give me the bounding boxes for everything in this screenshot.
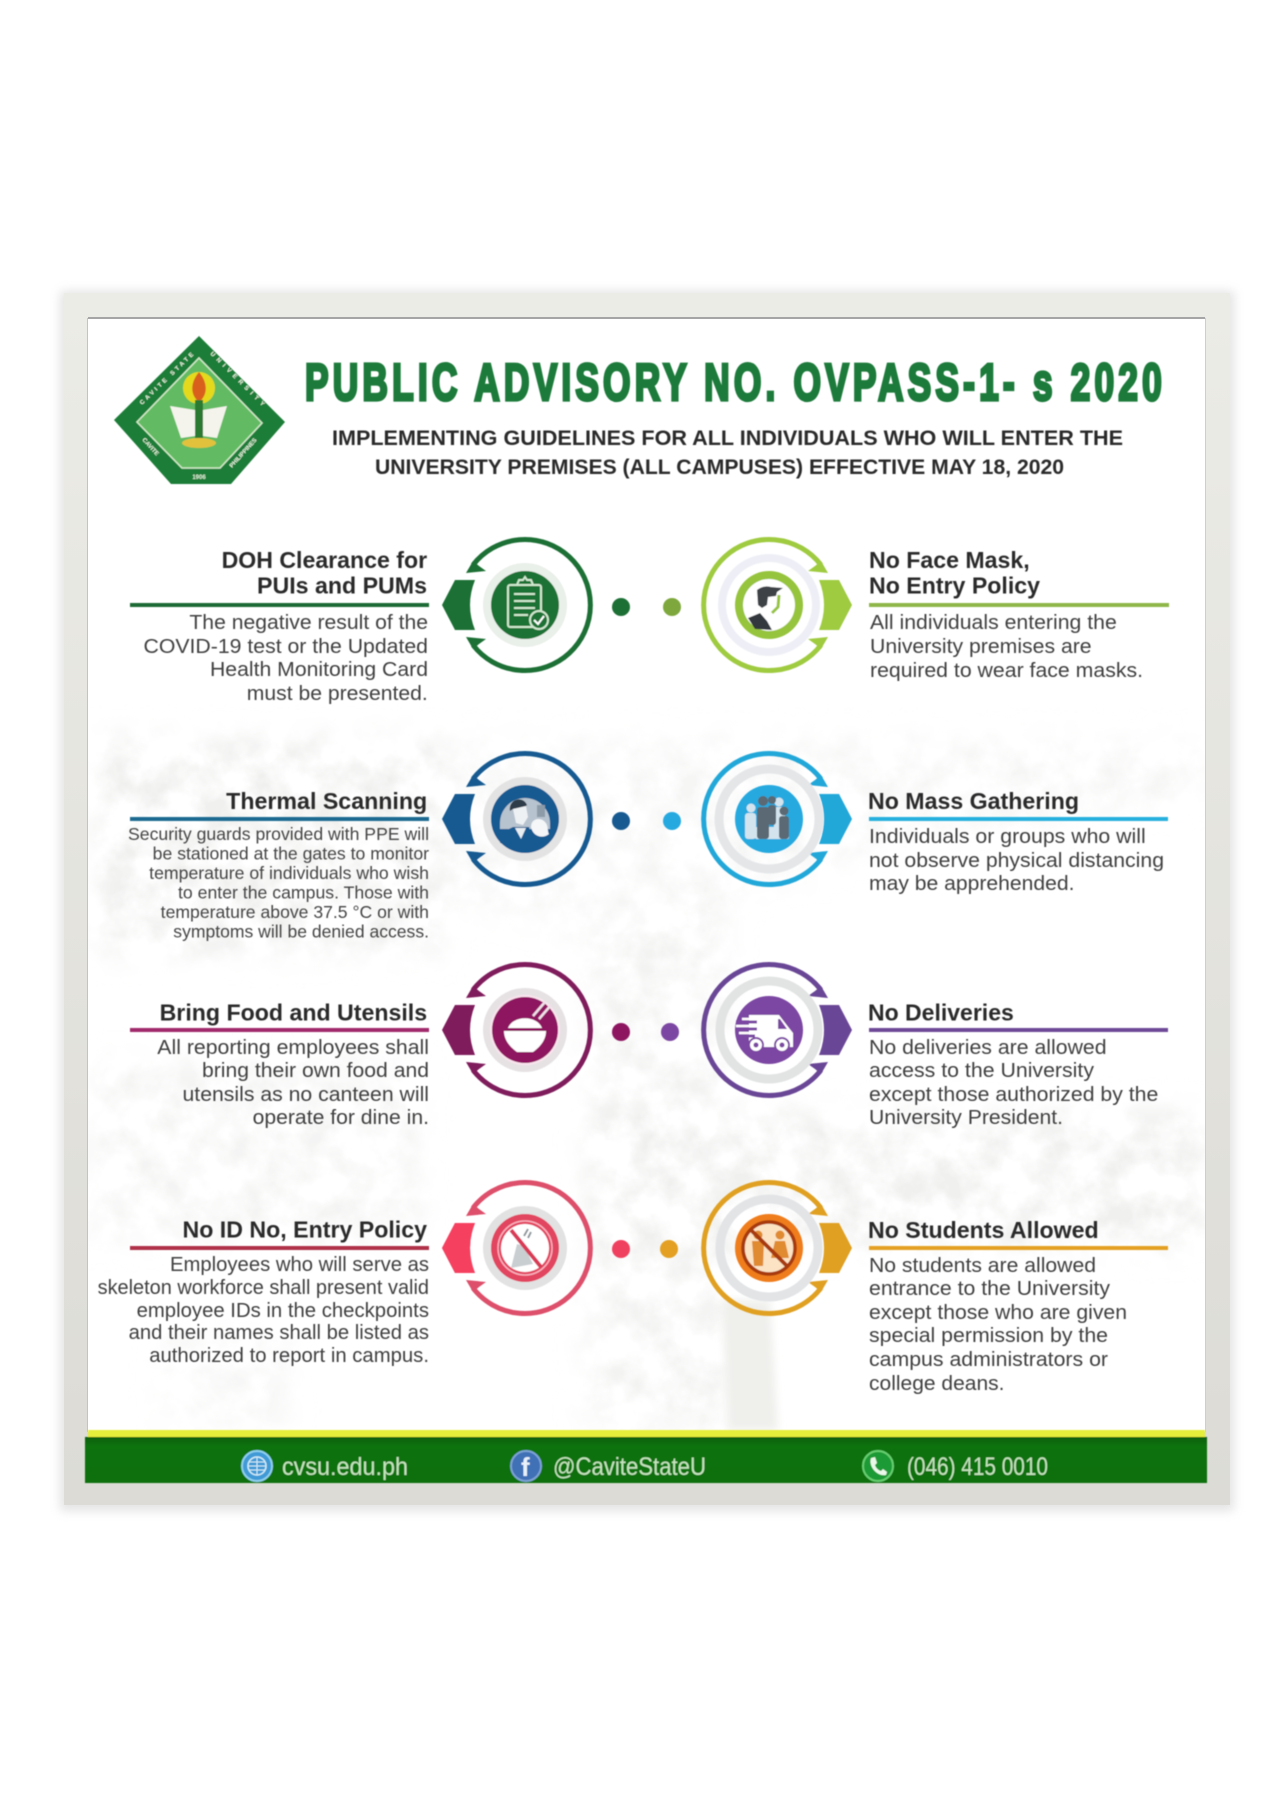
panel: No ID No Entry Policy text: and their names shall be listed as: [129, 1321, 429, 1344]
panel: Bring Food and Utensils text: [130, 1000, 429, 1129]
panel: No Mass Gathering text: Individuals or groups who will: [869, 825, 1146, 848]
dots row 4: [612, 1240, 678, 1258]
panel: DOH Clearance text: Health Monitoring Card: [210, 658, 428, 681]
panel: No ID No Entry Policy text: [98, 1216, 429, 1367]
panel: No Deliveries text: [868, 1000, 1168, 1129]
panel: Thermal Scanning text: be stationed at the gates to monitor: [153, 844, 429, 864]
panel: DOH Clearance text: DOH Clearance for: [222, 547, 427, 573]
icon: crowd ring: [704, 754, 852, 884]
icon: delivery truck ring: [704, 964, 852, 1096]
panel: Thermal Scanning text: temperature above 37.5 °C or with: [161, 902, 429, 922]
panel: No ID No Entry Policy text: skeleton workforce shall present valid: [98, 1276, 429, 1299]
panel: No Deliveries text: No Deliveries: [868, 1000, 1014, 1026]
icon: face mask ring: [704, 540, 852, 670]
panel: No ID No Entry Policy text: Employees who will serve as: [170, 1253, 429, 1276]
logo: Cavite State University seal: 1906: [192, 475, 206, 481]
panel: Bring Food and Utensils text: All reporting employees shall: [157, 1036, 429, 1059]
icon: rice bowl ring: [442, 964, 590, 1096]
dots row 1: [612, 598, 681, 616]
facebook handle: @CaviteStateU: [553, 1453, 706, 1481]
panel: DOH Clearance text: COVID-19 test or the Updated: [144, 635, 428, 658]
panel: No Face Mask text: No Face Mask,: [869, 547, 1030, 573]
panel: No Face Mask text: [869, 547, 1169, 682]
icon: no students ring: [704, 1182, 852, 1314]
panel: Thermal Scanning text: Security guards provided with PPE will: [128, 824, 429, 844]
panel: No Students Allowed text: except those who are given: [869, 1301, 1127, 1324]
panel: No Students Allowed text: [868, 1217, 1168, 1395]
dots row 2: [612, 812, 681, 830]
subtitle: [332, 427, 1123, 479]
panel: Thermal Scanning text: symptoms will be denied access.: [173, 922, 429, 942]
panel: DOH Clearance text: must be presented.: [247, 682, 428, 705]
panel: Bring Food and Utensils text: operate for dine in.: [253, 1106, 429, 1129]
icon: phone: [863, 1451, 893, 1481]
panel: No Face Mask text: required to wear face masks.: [870, 659, 1143, 682]
icon: thermal scanning ring: [442, 754, 590, 884]
phone number: (046) 415 0010: [907, 1453, 1048, 1481]
panel: DOH Clearance text: PUIs and PUMs: [257, 572, 427, 598]
panel: No ID No Entry Policy text: No ID No, Entry Policy: [182, 1216, 427, 1242]
icon: globe: [242, 1451, 272, 1481]
panel: No Students Allowed text: special permission by the: [869, 1324, 1108, 1347]
background faded campus photo: [92, 738, 1205, 1430]
panel: No Students Allowed text: campus administrators or: [869, 1348, 1108, 1371]
panel: No Deliveries text: access to the University: [869, 1059, 1095, 1082]
logo: Cavite State University seal: CAVITE: [141, 437, 159, 457]
subtitle: UNIVERSITY PREMISES (ALL CAMPUSES) EFFECTIVE MAY 18, 2020: [375, 456, 1064, 479]
subtitle: IMPLEMENTING GUIDELINES FOR ALL INDIVIDUALS WHO WILL ENTER THE: [332, 427, 1123, 450]
panel: No Mass Gathering text: not observe physical distancing: [869, 849, 1164, 872]
icon: facebook: [511, 1451, 541, 1482]
icon: no ID ring: [442, 1182, 590, 1314]
panel: No ID No Entry Policy text: authorized to report in campus.: [149, 1344, 429, 1367]
logo: Cavite State University seal: PHILIPPINES: [229, 438, 258, 469]
panel: Bring Food and Utensils text: bring their own food and: [202, 1059, 429, 1082]
logo: Cavite State University seal: [114, 336, 285, 484]
icon: clipboard ring: [442, 540, 590, 670]
panel: Bring Food and Utensils text: utensils as no canteen will: [182, 1083, 429, 1106]
panel: No ID No Entry Policy text: employee IDs in the checkpoints: [137, 1299, 429, 1322]
panel: No Mass Gathering text: [868, 788, 1168, 895]
panel: Thermal Scanning text: [128, 788, 429, 942]
panel: Thermal Scanning text: to enter the campus. Those with: [178, 882, 429, 902]
panel: No Face Mask text: All individuals entering the: [870, 611, 1117, 634]
dots row 3: [612, 1023, 679, 1041]
panel: No Deliveries text: University President.: [869, 1106, 1063, 1129]
footer bar: [85, 1430, 1207, 1483]
panel: No Students Allowed text: entrance to the University: [869, 1277, 1111, 1300]
page frame: [60, 291, 1234, 1511]
icon: facebook: f: [521, 1452, 530, 1482]
title: PUBLIC ADVISORY NO. OVPASS-1- s 2020: [305, 354, 1162, 412]
panel: No Students Allowed text: No Students Allowed: [868, 1217, 1099, 1243]
panel: No Face Mask text: University premises are: [870, 635, 1092, 658]
website: cvsu.edu.ph: [282, 1453, 408, 1481]
panel: No Face Mask text: No Entry Policy: [869, 572, 1040, 598]
panel: Thermal Scanning text: temperature of individuals who wish: [149, 863, 429, 883]
panel: Bring Food and Utensils text: Bring Food and Utensils: [160, 1000, 427, 1026]
panel: No Deliveries text: No deliveries are allowed: [869, 1036, 1107, 1059]
panel: No Students Allowed text: No students are allowed: [869, 1254, 1096, 1277]
logo: Cavite State University seal: CAVITE STATE: [139, 352, 195, 406]
logo: Cavite State University seal: UNIVERSITY: [209, 351, 265, 408]
panel: DOH Clearance text: [130, 547, 429, 705]
panel: No Mass Gathering text: may be apprehended.: [869, 872, 1074, 895]
panel: No Students Allowed text: college deans.: [869, 1372, 1004, 1395]
panel: Thermal Scanning text: Thermal Scanning: [226, 788, 427, 814]
panel: No Deliveries text: except those authorized by the: [869, 1083, 1158, 1106]
panel: DOH Clearance text: The negative result of the: [189, 611, 428, 634]
panel: No Mass Gathering text: No Mass Gathering: [868, 788, 1079, 814]
